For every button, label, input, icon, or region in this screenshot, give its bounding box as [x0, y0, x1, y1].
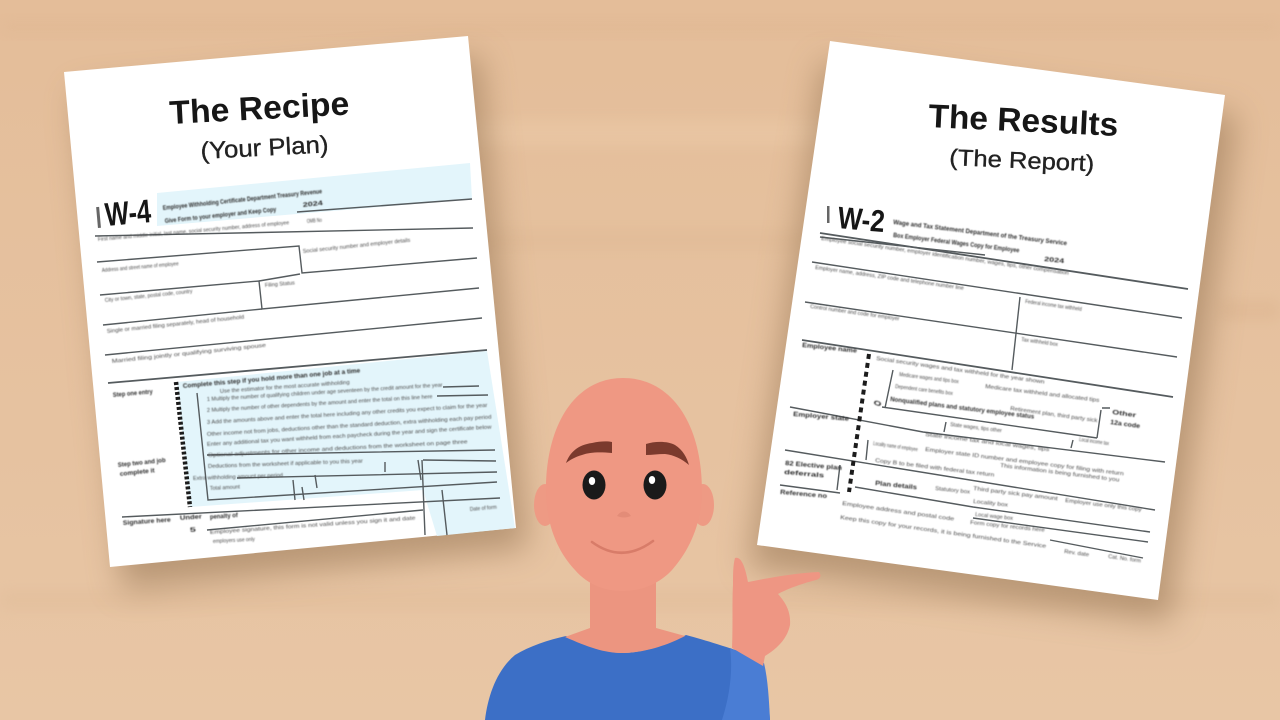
form fine print: Total amount: [210, 484, 241, 492]
title: The Results: The Results: [928, 97, 1119, 143]
form fine print: Local wage box: [975, 512, 1014, 522]
form fine print: Employer state: [793, 412, 850, 423]
subtitle: Your Plan: (Your Plan): [200, 131, 329, 165]
form fine print: penalty of: [210, 513, 239, 521]
form fine print: Copy B to be filed with federal tax return: [875, 458, 995, 479]
form fine print: Employer state ID number and employee copy for filing with return: [925, 447, 1124, 477]
form fine print: deferrals: [784, 470, 825, 480]
paper shadows: [76, 56, 1237, 622]
form fine print: 2 Multiply the number of other dependents by the amount and enter the total on this line here: [207, 394, 433, 414]
form fine print: 12a code: [1110, 420, 1141, 430]
panel: W-2 form, The Results: [757, 41, 1225, 600]
form rules: [780, 233, 1188, 558]
pointing hand: [732, 558, 820, 666]
head: [546, 378, 702, 591]
form fine print: Medicare tax withheld and allocated tips: [985, 384, 1100, 404]
form fine print: Address and street name of employee: [102, 261, 179, 274]
form fine print: Employee signature, this form is not valid unless you sign it and date: [210, 516, 416, 536]
dotted section divider: [849, 354, 869, 492]
form fine print: Locality box: [973, 499, 1009, 509]
form fine print: Give Form to your employer and Keep Copy: [165, 207, 277, 225]
form fine print: employers use only: [213, 537, 256, 545]
form fine print: 5: [190, 528, 197, 534]
form fine print: Keep this copy for your records, it is being furnished to the Service: [840, 515, 1047, 550]
form fine print: Employer name, address, ZIP code and telephone number line: [815, 265, 964, 292]
eyebrows: [566, 441, 689, 465]
form fine print: Step two and job: [118, 458, 166, 469]
form fine print: Retirement plan, third party sick: [1010, 406, 1098, 424]
title: The Recipe: The Recipe: [168, 85, 350, 131]
form fine print: 2024: [1044, 257, 1065, 265]
form fine print: First name and middle initial, last name, social security number, address of employee: [98, 220, 290, 243]
form rules: [95, 199, 500, 535]
form number: W-2: W-2: [836, 200, 886, 239]
form fine print: Married filing jointly or qualifying surviving spouse: [112, 343, 267, 365]
form fine print: Medicare wages and tips box: [899, 372, 959, 385]
form fine print: Nonqualified plans and statutory employee status: [890, 397, 1035, 421]
form fine print: Third party sick pay amount: [973, 486, 1059, 502]
form fine print: Employee Withholding Certificate Department Treasury Revenue: [163, 189, 323, 212]
form fine print: Control number and code for employer: [810, 304, 900, 323]
form fine print: Extra withholding amount per period: [193, 473, 283, 482]
form fine print: Federal income tax withheld: [1025, 299, 1082, 313]
form fine print: Optional adjustments for other income and deductions from the worksheet on page three: [208, 439, 468, 459]
form fine print: [98, 189, 497, 545]
nose: [617, 512, 631, 518]
form fine print: Tax withheld box: [1021, 337, 1059, 348]
form fine print: Other: [1112, 410, 1137, 419]
form fine print: Use the estimator for the most accurate withholding: [220, 380, 350, 395]
dotted section divider: [176, 382, 190, 507]
form fine print: Complete this step if you hold more than one job at a time: [183, 368, 361, 390]
form fine print: Employer use only this copy: [1065, 498, 1143, 513]
form fine print: [780, 220, 1143, 565]
form fine print: Filing Status: [265, 280, 296, 289]
form fine print: 3 Add the amounts above and enter the total here including any other credits you expect to claim for the year: [207, 403, 488, 426]
form fine print: 1 Multiply the number of qualifying children under age seventeen by the credit amount for the year: [207, 383, 443, 403]
form fine print: State wages, tips other: [950, 422, 1002, 434]
form fine print: Statutory box: [935, 486, 971, 496]
form fine print: Box Employer Federal Wages Copy for Employee: [893, 233, 1020, 255]
shirt: [485, 635, 770, 720]
mouth: [592, 541, 653, 553]
form fine print: 82 Elective plan: [785, 461, 843, 472]
form fine print: complete it: [120, 468, 155, 478]
form fine print: Rev. date: [1064, 549, 1090, 558]
form fine print: Dependent care benefits box: [895, 384, 954, 397]
form fine print: Enter any additional tax you want withheld from each paycheck during the year and sign the certificate below: [207, 425, 492, 448]
form fine print: Employee social security number, employer identification number, wages, tips, other compensation: [821, 236, 1069, 277]
form fine print: This information is being furnished to you: [1000, 463, 1120, 484]
character: smiling bald person pointing: [485, 378, 820, 720]
form fine print: Wage and Tax Statement Department of the Treasury Service: [893, 220, 1068, 247]
form number: W-4: W-4: [103, 192, 153, 233]
neck: [565, 570, 685, 653]
form fine print: Reference no: [780, 490, 828, 500]
form fine print: Cat. No. form: [1108, 554, 1141, 565]
form fine print: Under: [180, 514, 203, 522]
form fine print: Deductions from the worksheet if applicable to you this year: [208, 459, 363, 470]
subtitle: The Report: (The Report): [949, 144, 1095, 176]
ears: [534, 484, 714, 526]
panel: W-4 form, The Recipe: [64, 36, 516, 567]
form fine print: Step one entry: [113, 389, 154, 399]
form fine print: Plan details: [875, 481, 918, 491]
form fine print: State income tax and local wages, tips: [925, 432, 1050, 453]
eyes: [582, 470, 666, 500]
form fine print: Social security wages and tax withheld for the year shown: [876, 356, 1045, 386]
form fine print: Date of form: [470, 505, 497, 513]
form fine print: OMB No: [307, 218, 322, 225]
form fine print: Social security number and employer details: [303, 238, 411, 255]
form number: W-4: [96, 192, 153, 233]
form fine print: Employee name: [802, 343, 858, 355]
form fine print: Locality name of employee: [873, 441, 918, 453]
form fine print: Local income tax: [1079, 437, 1110, 447]
form fine print: Signature here: [123, 518, 172, 527]
form fine print: 2024: [303, 201, 324, 209]
form fine print: Form copy for records here: [970, 520, 1045, 534]
form fine print: Single or married filing separately, head of household: [107, 315, 245, 335]
form fine print: O: [872, 400, 882, 409]
form fine print: City or town, state, postal code, country: [105, 289, 193, 304]
form fine print: Employee address and postal code: [842, 501, 955, 523]
blue highlight bands: [157, 163, 515, 536]
form fine print: Other income not from jobs, deductions other than the standard deduction, extra withholding each pay period: [207, 415, 492, 438]
